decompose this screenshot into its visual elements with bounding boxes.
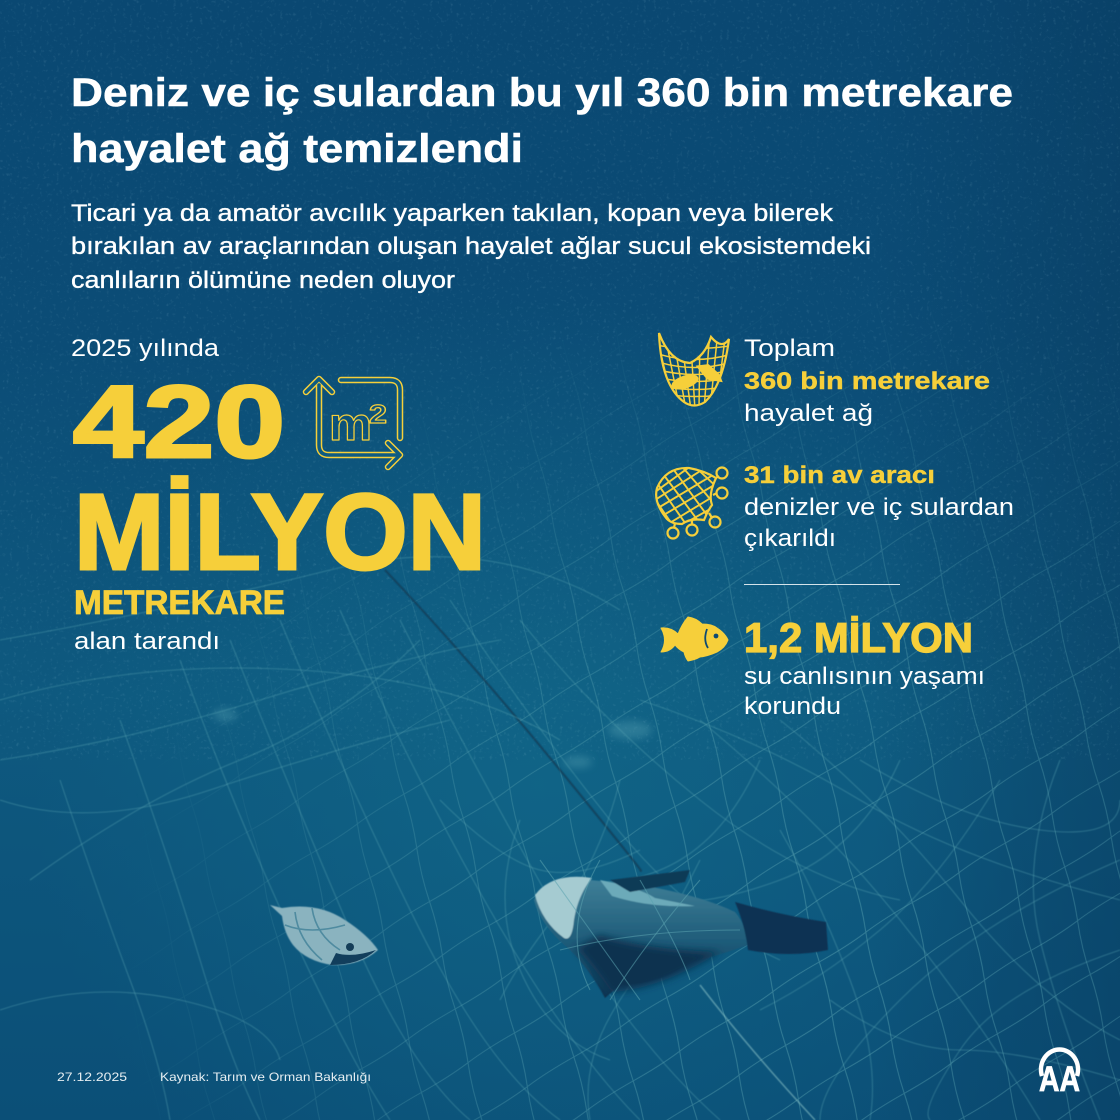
icon: square metre arrows: 2 [369,399,387,429]
icon: net bag with fish [658,332,730,407]
main statistic: 420 million square metres: 420 [73,365,285,479]
main statistic: 420 million square metres: METREKARE [74,584,285,622]
icon: square metre arrows [306,379,400,467]
subtitle [71,200,871,294]
stat: 360 bin metrekare: 360 bin metrekare [744,368,990,395]
icon: square metre arrows: m [329,398,372,450]
subtitle: Ticari ya da amatör avcılık yaparken takılan, kopan veya bilerek [71,200,834,227]
main statistic: 420 million square metres [71,335,486,655]
stat: 1,2 milyon: korundu [744,693,841,720]
footer: date and source: 27.12.2025 [57,1070,127,1084]
title: hayalet ağ temizlendi [71,127,523,171]
stat: 1,2 milyon: su canlısının yaşamı [744,663,985,690]
stat: 360 bin metrekare: Toplam [744,335,835,362]
stat: 31 bin av aracı: çıkarıldı [744,525,836,552]
stat: 1,2 milyon: 1,2 MİLYON [744,614,973,661]
trapped seal in net [534,870,828,998]
net strands [0,557,1120,1120]
footer: date and source [57,1070,371,1084]
title [71,71,1013,171]
subtitle: bırakılan av araçlarından oluşan hayalet ağlar sucul ekosistemdeki [71,233,871,260]
pale floats in the net [213,709,652,768]
stat: 360 bin metrekare: hayalet ağ [744,400,873,427]
main statistic: 420 million square metres: MİLYON [74,471,486,592]
stat: 1,2 milyon [744,614,985,720]
stat: 360 bin metrekare [744,335,990,427]
icon: fishing net with floats [652,462,728,538]
subtitle: canlıların ölümüne neden oluyor [71,267,455,294]
logo: Anadolu Agency [1039,1050,1080,1099]
logo: Anadolu Agency: AA [1039,1060,1080,1099]
stat: 31 bin av aracı: denizler ve iç sulardan [744,494,1014,521]
stat: 31 bin av aracı [744,462,1014,552]
title: Deniz ve iç sulardan bu yıl 360 bin metrekare [71,71,1013,115]
small fish in net [270,905,378,965]
icon: fish [661,617,728,661]
footer: date and source: Kaynak: Tarım ve Orman Bakanlığı [160,1070,371,1084]
main statistic: 420 million square metres: alan tarandı [74,628,220,655]
stat: 31 bin av aracı: 31 bin av aracı [744,462,935,489]
seal overlay strands [540,860,740,1000]
main statistic: 420 million square metres: 2025 yılında [71,335,220,362]
